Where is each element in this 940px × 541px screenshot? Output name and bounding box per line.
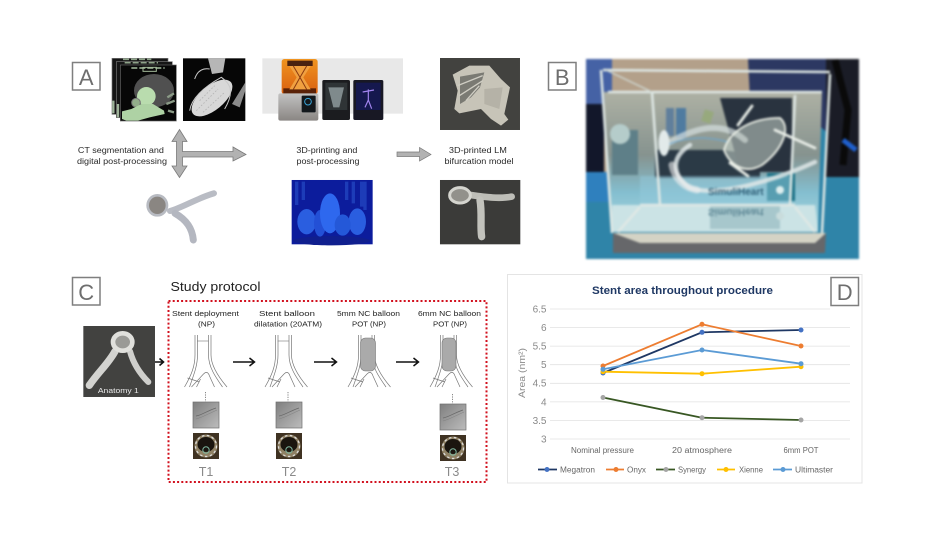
logo text in tank: SimuliHeart	[708, 187, 764, 198]
series: Megatron	[600, 328, 804, 376]
legend	[538, 466, 833, 474]
arrow: grey right	[397, 148, 431, 161]
panel: B	[548, 59, 859, 259]
caption: CT segmentation: CT segmentation and	[78, 146, 164, 155]
label: B	[548, 62, 576, 90]
panel: A	[72, 58, 520, 245]
caption: 3D-printed model: 3D-printed LM	[449, 146, 507, 155]
y axis labels: 3	[541, 434, 547, 446]
printer	[278, 59, 318, 121]
step 4: 6mm balloon POT	[418, 309, 483, 479]
image: heart CT render	[183, 58, 245, 123]
image: printed model bottom photo	[440, 180, 520, 244]
y axis labels: 6.5	[533, 304, 547, 316]
arrow: step 3 to 4	[396, 358, 418, 366]
arrow: step 1 to 2	[233, 358, 254, 366]
tank interior	[604, 92, 822, 232]
step 4: 6mm balloon POT: T3	[445, 465, 459, 479]
label: A	[72, 62, 100, 90]
step 2: balloon dilatation: Stent balloon	[259, 309, 315, 318]
image: printer group	[262, 58, 403, 121]
label: D: D	[837, 280, 853, 305]
image: CT slice stack	[112, 58, 176, 121]
step 4: 6mm balloon POT: 6mm NC balloon	[418, 309, 481, 318]
step 4: 6mm balloon POT: POT (NP)	[433, 320, 468, 328]
panel: C	[72, 278, 486, 482]
anatomical model	[658, 106, 815, 191]
caption: 3D-printing: 3D-printing and	[296, 146, 357, 155]
step 1: stent deployment: T1	[199, 465, 213, 479]
image: anatomy 1: Anatomy 1	[98, 386, 139, 395]
chart frame	[508, 274, 862, 483]
x axis labels	[571, 446, 819, 455]
series: Synergy	[600, 395, 804, 422]
step 2: balloon dilatation: T2	[282, 465, 296, 479]
arrow: anatomy to protocol	[155, 358, 164, 366]
caption: 3D-printed model: bifurcation model	[444, 157, 514, 166]
legend: Megatron	[560, 466, 595, 474]
step 3: 5mm balloon POT	[337, 309, 402, 387]
chart title: Stent area throughout procedure	[592, 285, 773, 297]
label: D	[831, 278, 858, 306]
caption: 3D-printing: post-processing	[296, 157, 360, 166]
arrow: step 2 to 3	[314, 358, 336, 366]
step 1: stent deployment: Stent deployment	[172, 309, 240, 318]
x axis labels: 20 atmosphere	[672, 446, 733, 455]
legend: Ultimaster	[795, 466, 833, 474]
step 2: balloon dilatation	[254, 309, 323, 479]
legend: Synergy	[678, 466, 706, 474]
tank frame	[601, 70, 830, 233]
x axis labels: Nominal pressure	[571, 446, 635, 455]
legend: Xienne	[739, 466, 764, 474]
step 3: 5mm balloon POT: 5mm NC balloon	[337, 309, 400, 318]
image: anatomy 1	[83, 326, 155, 397]
cure unit	[353, 80, 383, 120]
y axis labels: 5.5	[533, 342, 547, 352]
bottles	[666, 108, 674, 136]
label: A: A	[79, 65, 94, 90]
label: C: C	[78, 280, 94, 305]
arrow: three-way grey	[172, 130, 246, 178]
y axis labels	[533, 304, 547, 446]
series: Onyx	[600, 322, 804, 368]
legend: Onyx	[627, 466, 646, 474]
step 1: stent deployment	[172, 309, 241, 479]
step 3: 5mm balloon POT: POT (NP)	[352, 320, 387, 328]
step 1: stent deployment: (NP)	[198, 320, 216, 328]
heading: Study protocol: Study protocol	[170, 279, 261, 294]
series: Ultimaster	[600, 348, 804, 372]
label: B: B	[555, 65, 570, 90]
image: blue resin prints	[292, 180, 373, 245]
y axis labels: 3.5	[533, 416, 547, 427]
panel: D	[508, 274, 862, 483]
y axis labels: 5	[541, 360, 547, 371]
y axis labels: 4	[541, 397, 547, 408]
tank base	[613, 233, 826, 253]
step 2: balloon dilatation: dilatation (20ATM)	[254, 320, 323, 328]
y axis labels: 6	[541, 323, 547, 334]
caption: CT segmentation: digital post-processing	[77, 157, 167, 166]
series: Xienne	[600, 364, 804, 376]
y axis title: Area (nm²)	[517, 348, 528, 398]
x axis labels: 6mm POT	[784, 446, 819, 455]
wash unit	[322, 80, 350, 120]
image: water tank photo: SimuliHeart	[708, 206, 764, 217]
label: C	[72, 278, 100, 305]
image: water tank photo	[586, 59, 859, 259]
image: vessel model	[148, 193, 214, 240]
y axis labels: 4.5	[533, 379, 547, 390]
image: printed model top photo	[440, 58, 520, 130]
protocol dotted box	[168, 301, 486, 482]
